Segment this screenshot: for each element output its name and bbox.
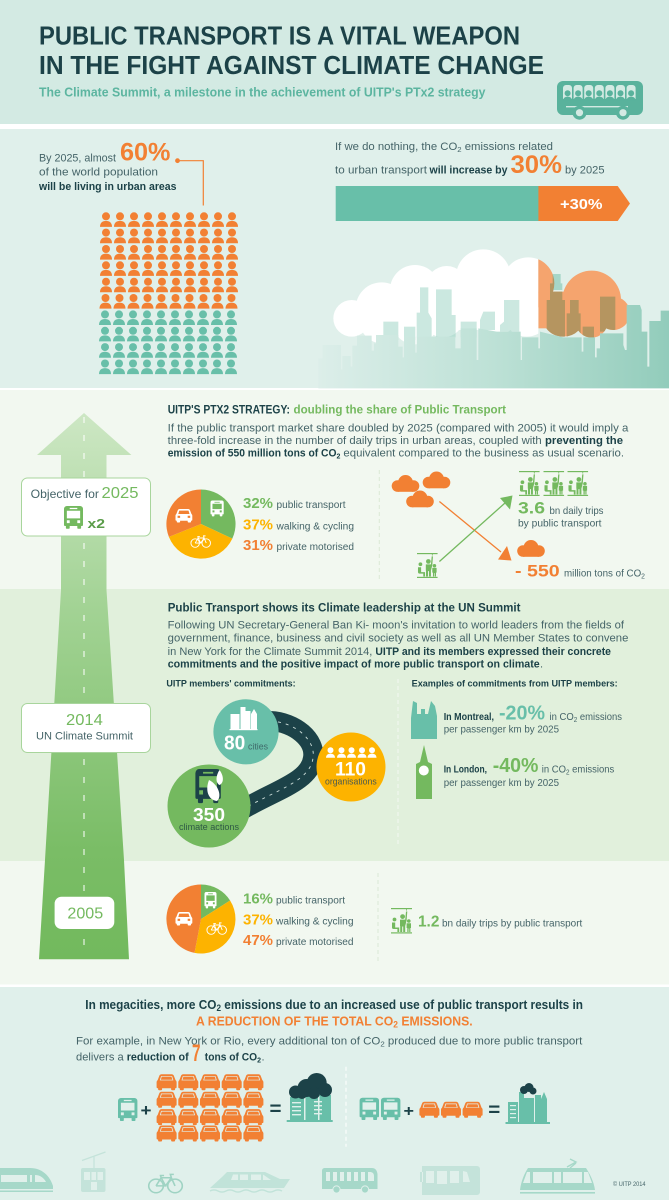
equals: = (270, 1099, 282, 1120)
icon: clean city (506, 1083, 550, 1124)
icon: bus side view (557, 81, 643, 120)
callout: objective for 2025 (22, 478, 150, 536)
heading: 2 (393, 1019, 398, 1029)
text block: delivers a (76, 1052, 125, 1064)
circle: 110 organisations: organisations (325, 777, 377, 787)
icon: clouds (392, 472, 450, 507)
panel: PTx2 strategy (22, 402, 645, 581)
text block: produced due to more public transport (385, 1035, 582, 1047)
stat: London (444, 755, 614, 789)
text block (168, 620, 628, 670)
text block: 2 (380, 1039, 385, 1048)
circle: 80 cities: cities (248, 741, 268, 751)
title: PUBLIC TRANSPORT IS A VITAL WEAPON (39, 22, 520, 50)
plus: + (404, 1103, 414, 1120)
icon: Big Ben (416, 745, 432, 799)
stat: London: in CO (542, 764, 569, 776)
stat: Montreal (444, 702, 622, 736)
panel: 2005 (55, 873, 582, 962)
text block: tons of CO (205, 1052, 261, 1064)
icon: polluted city (287, 1073, 333, 1122)
legend: pie 2005: 47% (243, 932, 273, 949)
callout: objective for 2025: 2025 (102, 485, 138, 502)
panel: megacities (76, 997, 583, 1147)
icon: two buses (360, 1098, 400, 1120)
text block: UITP and its members expressed their concrete (375, 646, 611, 658)
equation: today (118, 1073, 333, 1142)
heading: Public Transport shows its Climate leadership at the UN Summit (168, 601, 521, 615)
plus: + (140, 1101, 152, 1120)
icon: train (0, 1168, 53, 1192)
circle: 350 climate actions: 350 (193, 805, 225, 825)
equation: with more public transport (360, 1083, 550, 1124)
circle: 110 organisations (316, 732, 386, 802)
text block: equivalent compared to the business as usual scenario. (343, 447, 624, 459)
stat: London: per passenger km by 2025 (444, 777, 559, 789)
subtitle: The Climate Summit, a milestone in the achievement of UITP's PTx2 strategy (39, 84, 486, 100)
text block: Following UN Secretary-General Ban Ki- moon's invitation to world leaders from the fields of (168, 620, 625, 632)
legend: pie 2005: private motorised (276, 937, 354, 948)
arrow: road from 2005 to 2025 (37, 413, 131, 959)
subheading: examples: Examples of commitments from UITP members: (412, 679, 618, 689)
heading (168, 402, 506, 416)
stat: Montreal: in CO (550, 711, 576, 723)
text block: . (540, 658, 543, 670)
text: 30% increase: emissions related (462, 141, 553, 153)
stat: Montreal: In Montreal, (444, 711, 494, 723)
panel: UN Summit (22, 601, 628, 848)
icon: cloud (517, 540, 545, 557)
text block: three-fold increase in the number of daily trips in urban areas, coupled with (168, 435, 542, 447)
arrow: CO2 falling (439, 502, 512, 560)
circle: 350 climate actions (168, 764, 250, 848)
text: 30% increase (335, 141, 604, 179)
stat: Montreal: 2 (574, 717, 577, 724)
stat: 3.6 bn trips (518, 498, 604, 530)
icon: bicycle (149, 1174, 182, 1193)
text block: commitments and the positive impact of more public transport on climate (168, 658, 540, 670)
legend: pie 2025: 37% (243, 516, 273, 533)
stat: 3.6 bn trips: bn daily trips (550, 505, 604, 517)
icon: bus (322, 1168, 378, 1193)
stat: -550 million tons: million tons of CO (564, 569, 643, 580)
legend: pie 2005: public transport (276, 895, 345, 906)
text: 60% urban population: By 2025, almost (39, 152, 116, 164)
stat: London: In London, (444, 764, 487, 776)
icon: metro (420, 1166, 480, 1195)
heading: In megacities, more CO (85, 997, 230, 1012)
text: 30% increase: If we do nothing, the CO (335, 141, 454, 153)
circle: 80 cities (213, 699, 279, 764)
callout: 2005: 2005 (67, 905, 103, 922)
text block: reduction of (127, 1052, 189, 1064)
heading: EMISSIONS. (398, 1013, 473, 1028)
text: 30% increase: by 2025 (565, 165, 604, 177)
stat: Montreal: emissions (577, 711, 622, 723)
icon: boat (210, 1172, 290, 1192)
text: 30% increase: 2 (457, 145, 462, 154)
legend: pie 2005: 16% (243, 890, 273, 907)
stat: 1.2 bn trips (418, 914, 582, 931)
callout: objective for 2025: x2 (88, 516, 105, 531)
equals: = (488, 1100, 500, 1121)
callout: objective for 2025: Objective for (31, 487, 99, 501)
text block: emission of 550 million tons of CO (168, 447, 348, 459)
text block (168, 422, 629, 460)
diagram: more trips, less CO2 (392, 471, 645, 581)
diagram: road of commitments (168, 699, 386, 848)
text block: . (262, 1052, 265, 1064)
bar: +30% (336, 186, 630, 221)
text block: government, finance, business and civil society as well as all UN Member States to convene (168, 633, 628, 645)
icon: three cars (419, 1102, 483, 1118)
panel: transport modes strip (0, 1152, 646, 1195)
icon: Montreal skyline (411, 701, 437, 739)
panel: CO2 increase (318, 141, 669, 388)
circle: 80 cities: 80 (224, 732, 245, 754)
legend: pie 2025: 32% (243, 495, 273, 512)
panel: header (39, 22, 643, 120)
title: IN THE FIGHT AGAINST CLIMATE CHANGE (39, 52, 544, 80)
text block: preventing the (545, 435, 623, 447)
stat: -550 million tons (515, 562, 645, 581)
text block: For example, in New York or Rio, every additional ton of CO (76, 1035, 367, 1047)
text: 30% increase: 30% (510, 151, 562, 179)
stat: Montreal: per passenger km by 2025 (444, 724, 559, 736)
chart: pictogram of 100 people (99, 212, 238, 374)
text block: If the public transport market share doubled by 2025 (compared with 2005) it would imply a (168, 422, 629, 434)
legend: pie 2025: 31% (243, 537, 273, 554)
stat: 1.2 bn trips: bn daily trips by public transport (442, 918, 582, 930)
callout: 2014 (22, 704, 150, 752)
illustration: city skyline and clouds (318, 249, 669, 388)
stat: 3.6 bn trips: by public transport (518, 518, 602, 530)
text: 60% urban population (38, 138, 177, 193)
icon: commuters (391, 908, 412, 934)
heading: doubling the share of Public Transport (294, 402, 506, 416)
heading: 2 (216, 1003, 221, 1013)
stat: London: emissions (570, 764, 614, 776)
connector line (176, 159, 203, 206)
heading: A REDUCTION OF THE TOTAL CO (196, 1013, 406, 1028)
arrow: trips rising (439, 496, 512, 562)
chart: pie 2005 (166, 884, 235, 954)
icon: 20 cars (157, 1074, 263, 1142)
stat: London: -40% (493, 755, 539, 777)
text: 60% urban population: of the world population (39, 166, 158, 178)
stat: Montreal: -20% (499, 702, 545, 724)
icon: commuters (417, 471, 588, 578)
subheading: members' commitments: UITP members' commitments: (166, 679, 296, 689)
heading: emissions due to an increased use of public transport results in (221, 997, 583, 1012)
circle: 110 organisations: 110 (335, 759, 366, 780)
callout: 2014: 2014 (66, 712, 103, 729)
chart: pie 2025 (166, 489, 236, 559)
heading: UITP'S PTX2 STRATEGY: (168, 402, 290, 416)
title (39, 22, 544, 80)
text block: 7 (192, 1040, 200, 1067)
text block: 2 (336, 451, 340, 460)
panel: urbanisation (38, 138, 238, 374)
legend: pie 2005 (243, 890, 354, 949)
stat: 3.6 bn trips: 3.6 (518, 498, 545, 518)
text block: in New York for the Climate Summit 2014, (168, 646, 372, 658)
legend: pie 2005: walking & cycling (275, 916, 354, 927)
icon: tram (520, 1159, 595, 1194)
callout: 2014: UN Climate Summit (36, 731, 133, 743)
legend: pie 2025: private motorised (276, 542, 354, 553)
icon: bus (118, 1098, 137, 1121)
text block: 2 (257, 1056, 261, 1065)
stat: London: 2 (566, 770, 570, 777)
text: 60% urban population: will be living in urban areas (38, 181, 177, 193)
text: 30% increase: will increase by (429, 165, 508, 177)
text: 60% urban population: 60% (120, 138, 170, 166)
bar: +30%: +30% (560, 196, 602, 213)
legend: pie 2005: 37% (243, 911, 273, 928)
legend: pie 2025: public transport (276, 500, 346, 511)
stat: 1.2 bn trips: 1.2 (418, 914, 439, 931)
stat: -550 million tons: 2 (641, 574, 645, 581)
heading (85, 997, 583, 1029)
callout: 2005 (55, 897, 114, 929)
icon: gondola (81, 1152, 106, 1192)
copyright: © UITP 2014 (613, 1181, 646, 1188)
stat: -550 million tons: - 550 (515, 562, 560, 581)
text: 30% increase: to urban transport (335, 165, 427, 177)
circle: 350 climate actions: climate actions (179, 822, 239, 832)
text block (76, 1035, 582, 1067)
legend: pie 2025: walking & cycling (275, 521, 354, 532)
legend: pie 2025 (243, 495, 354, 554)
